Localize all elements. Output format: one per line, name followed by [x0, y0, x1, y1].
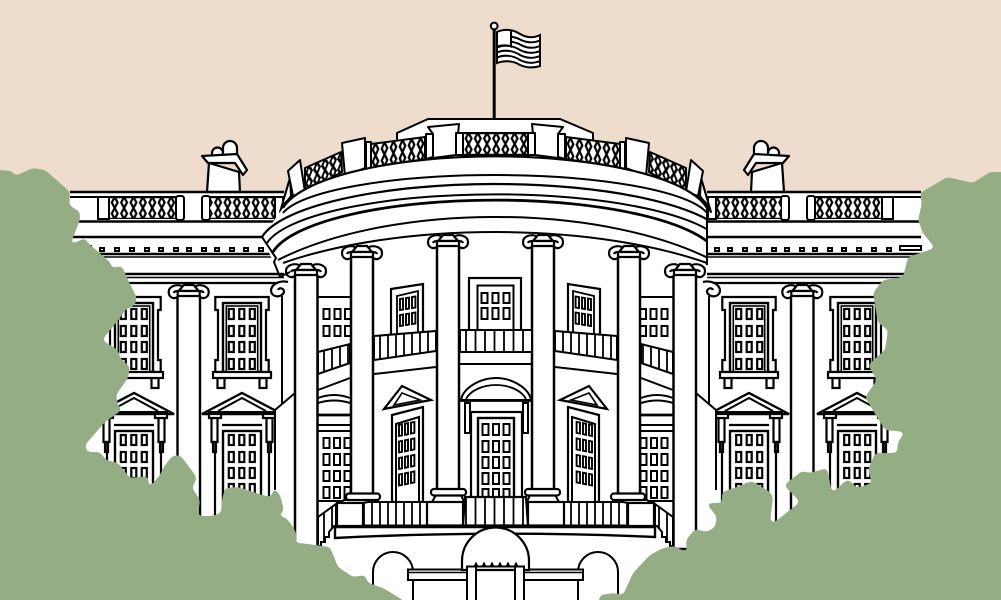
- centre upper window: [469, 278, 521, 334]
- icon: american flag on pole: [491, 23, 540, 120]
- balcony lower lines: [318, 367, 436, 403]
- right volute scroll: [703, 281, 720, 296]
- rotunda left half: [275, 215, 496, 600]
- entablature fill: [262, 156, 707, 275]
- rotunda right half: [495, 215, 716, 600]
- right wing of building: [691, 141, 933, 600]
- balcony balustrade side: [374, 331, 436, 360]
- centre balcony balustrade: [460, 330, 532, 352]
- flag cloth with stripes: [497, 30, 540, 67]
- outer column: [286, 264, 326, 549]
- wing window outer: [105, 297, 163, 388]
- right foliage tree: [595, 172, 1001, 600]
- centre arch: [462, 527, 529, 570]
- lower side cornice: [408, 570, 467, 600]
- lower bay outer band and window: [318, 415, 350, 501]
- left baluster panel far: [305, 152, 342, 192]
- inner column with base: [427, 235, 468, 526]
- entablature ends: [262, 208, 707, 277]
- upper side window: [391, 284, 423, 340]
- rotunda wall: [275, 215, 496, 600]
- centre door hood: [460, 378, 532, 433]
- wing door outer with pediment: [94, 393, 174, 541]
- icon: chimney: [202, 141, 247, 192]
- side stair balustrade: [318, 504, 336, 546]
- parapet bottom line: [283, 156, 707, 208]
- right end of parapet: [699, 178, 711, 212]
- right piers: [528, 124, 703, 196]
- centre terrace balustrade: [463, 497, 528, 526]
- left baluster panel near: [371, 137, 425, 168]
- wing door inner with pediment: [202, 393, 282, 541]
- left wing of building: [58, 141, 300, 600]
- left piers: [288, 124, 463, 196]
- middle column with base: [337, 246, 382, 526]
- wing window inner: [213, 297, 271, 388]
- upper bay outer windows: [318, 297, 351, 336]
- left foliage tree: [0, 168, 410, 600]
- terrace platform: [335, 527, 655, 538]
- terrace balustrade: [363, 502, 427, 526]
- centre balcony lower line: [460, 363, 532, 365]
- left volute scroll: [271, 281, 288, 296]
- wing balustrade: [70, 192, 284, 222]
- centre baluster panel: [463, 133, 529, 156]
- arch dentils: [474, 562, 518, 566]
- rotunda centre bay: [335, 278, 655, 600]
- curved moulding lines: [262, 175, 728, 263]
- wing cornice with dentils: [70, 237, 284, 283]
- rotunda junction wall lines: [275, 296, 295, 490]
- wing column: [169, 285, 209, 534]
- centre door: [471, 412, 522, 504]
- right baluster panel near: [566, 137, 620, 168]
- rotunda parapet: [280, 124, 711, 230]
- rotunda curved entablature: [262, 156, 728, 296]
- parapet base: [283, 156, 707, 230]
- flag pole: [491, 23, 498, 120]
- right baluster panel far: [649, 152, 686, 192]
- lower side arch: [373, 552, 413, 600]
- left end of parapet: [280, 178, 292, 212]
- centre gate piers: [467, 566, 524, 600]
- balcony balustrade outer: [318, 344, 350, 374]
- roof behind parapet: [397, 119, 593, 165]
- side door with pediment: [384, 386, 431, 502]
- wing white wall: [58, 192, 300, 600]
